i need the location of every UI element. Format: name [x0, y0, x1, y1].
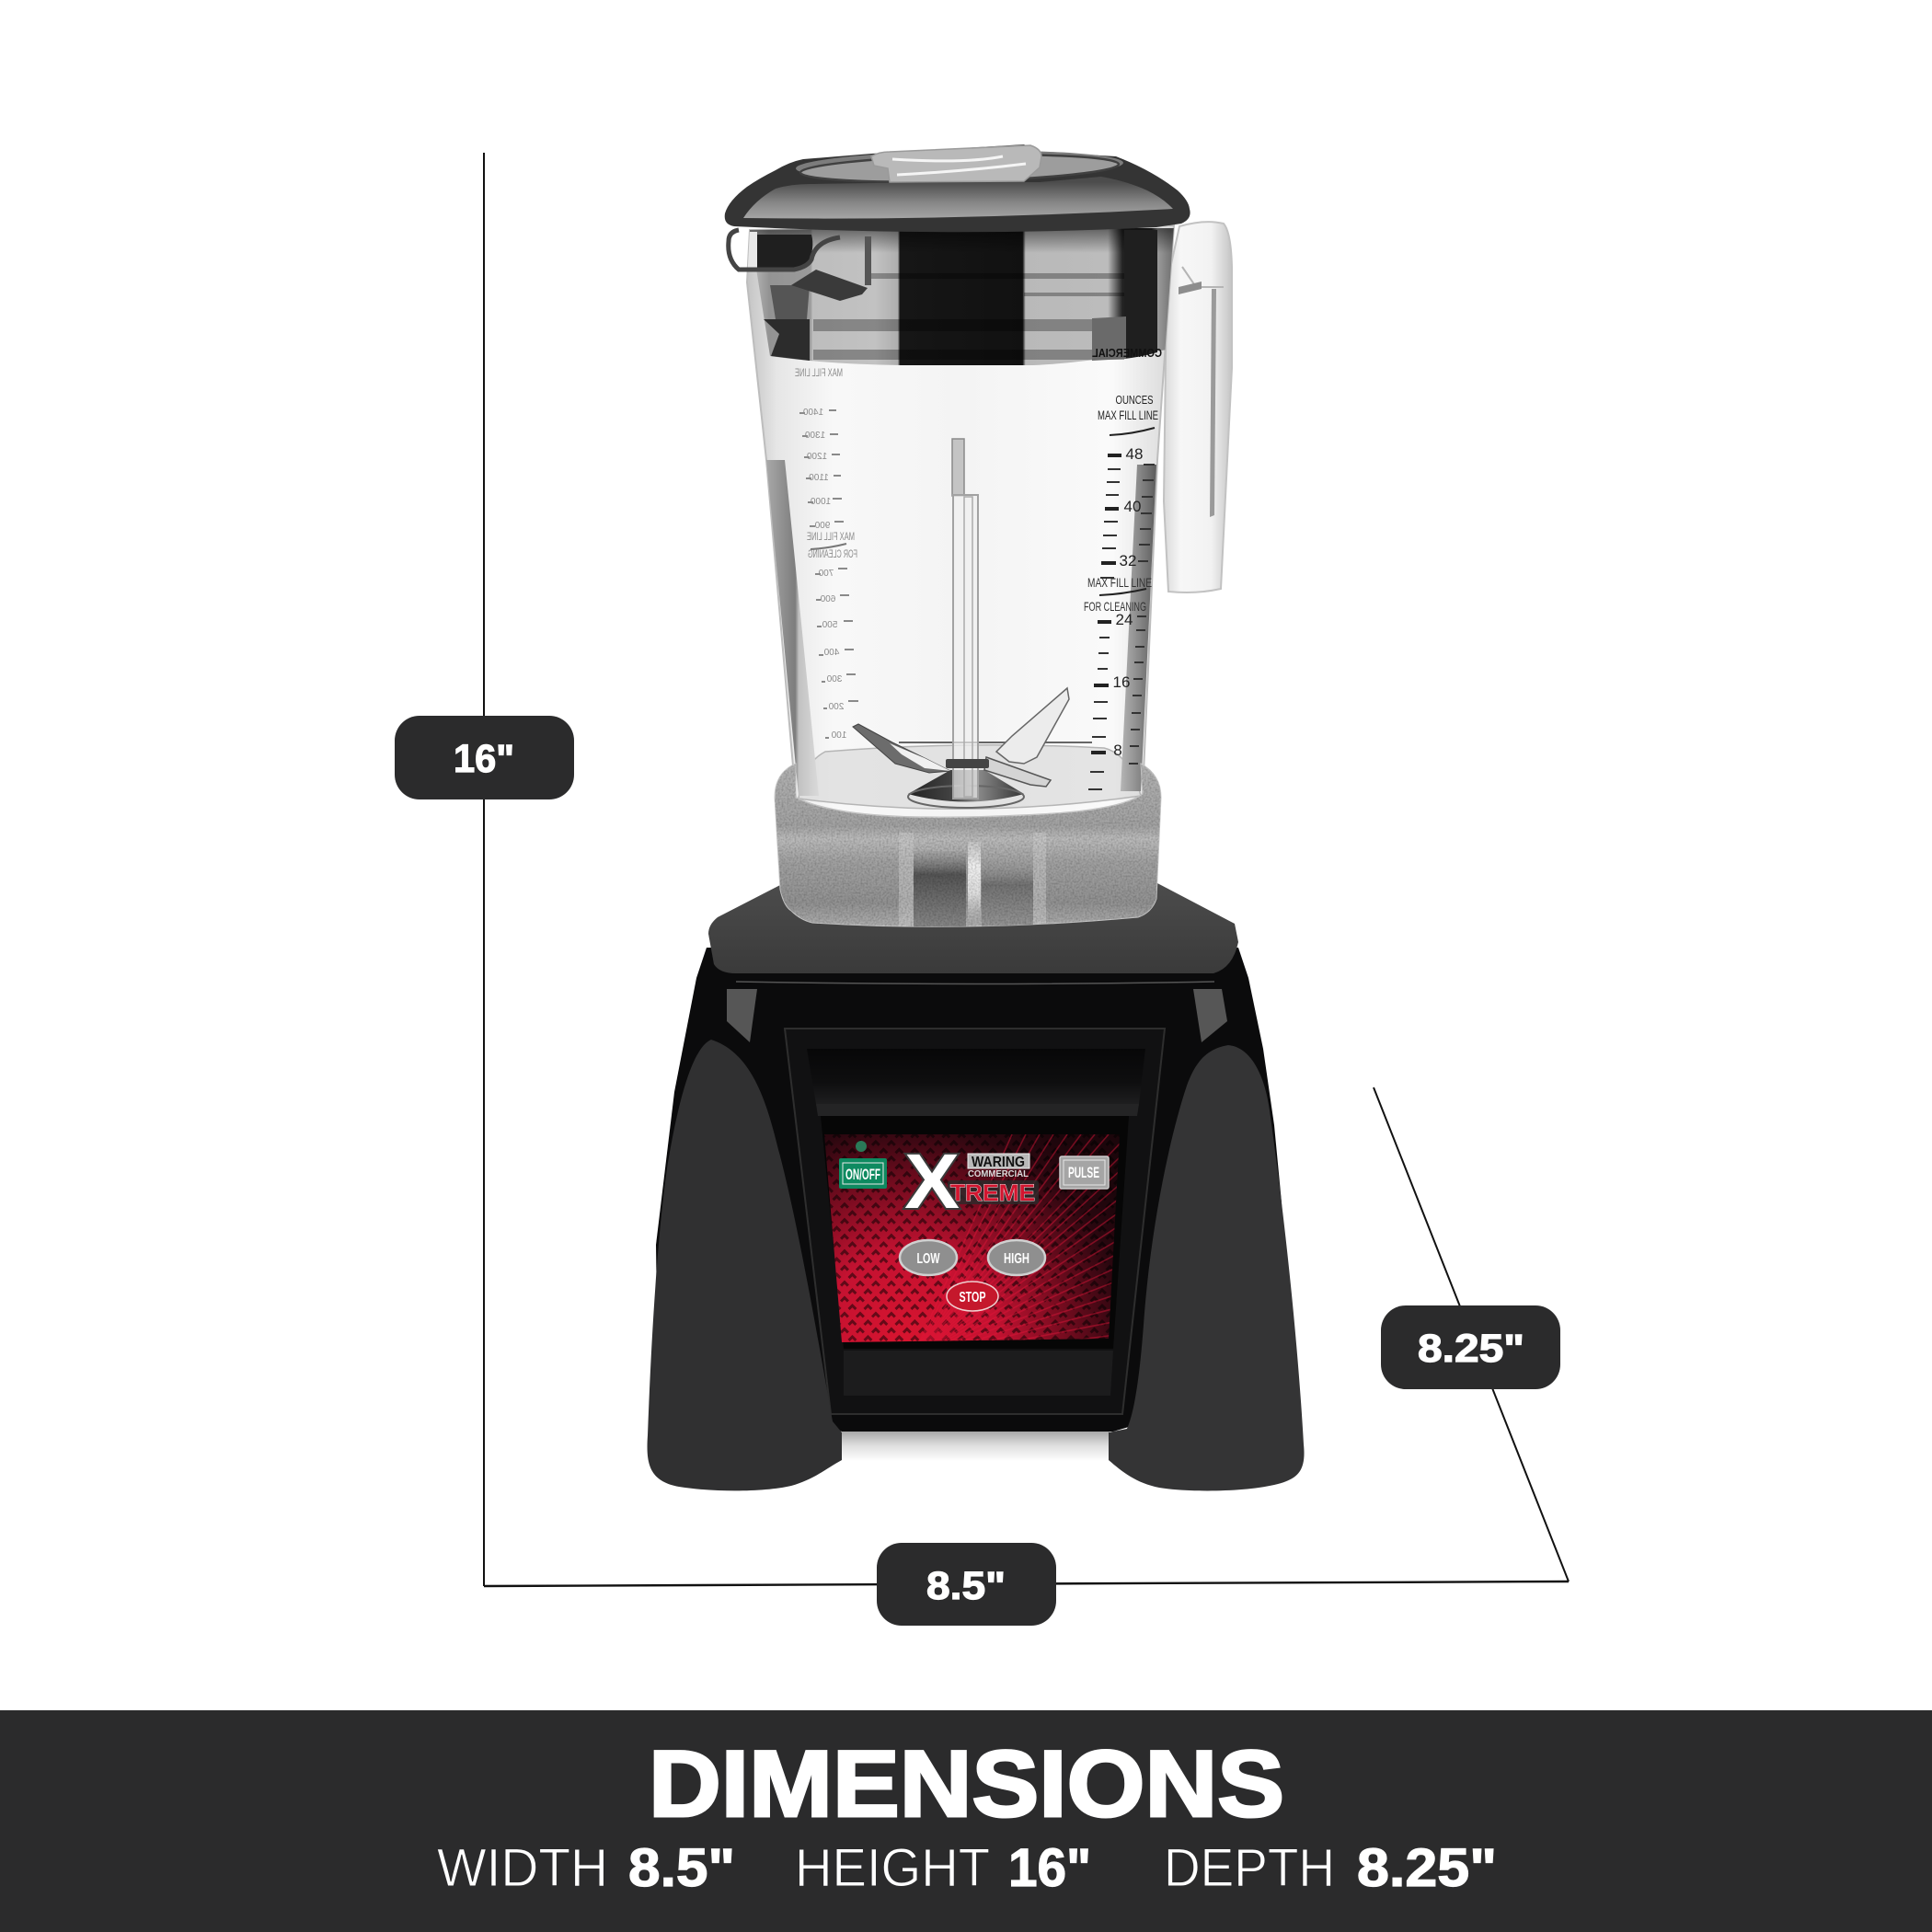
ounce numbers: 32	[1120, 552, 1136, 569]
left mirrored scale	[795, 366, 858, 741]
height label pill: 16"	[454, 737, 514, 781]
pulse button	[1060, 1156, 1109, 1189]
on/off button: ON/OFF	[845, 1166, 880, 1183]
far-side ticks	[1129, 465, 1155, 764]
blade hub	[908, 770, 1024, 802]
gloss highlight left	[727, 989, 757, 1042]
lower right blade	[984, 757, 1051, 787]
recess lip	[816, 1104, 1139, 1116]
blade assembly	[853, 439, 1069, 808]
width label pill	[877, 1543, 1056, 1626]
motor base shell	[656, 948, 1288, 1432]
jar pour spout loop	[729, 230, 840, 270]
cleaning rule	[1099, 589, 1146, 595]
on/off button	[839, 1158, 887, 1189]
millilitre labels: 1000	[810, 497, 831, 507]
millilitre labels: 600	[820, 594, 835, 604]
insert shading	[750, 228, 1174, 253]
lid well	[800, 151, 1119, 186]
width dimension line	[484, 1581, 1569, 1586]
depth dimension line	[1374, 1087, 1569, 1581]
label rays	[919, 1134, 1119, 1341]
lower bar	[844, 1351, 1113, 1396]
hub collar	[946, 759, 989, 768]
right blade	[996, 688, 1069, 764]
brand logo	[904, 1138, 1039, 1225]
footer measurements: WIDTH	[437, 1838, 608, 1898]
millilitre labels: MAX FILL LINE	[807, 530, 855, 543]
collar columns	[775, 762, 1162, 933]
for cleaning label: FOR CLEANING	[1084, 599, 1146, 614]
brand logo: COMMERCIAL	[968, 1169, 1029, 1179]
major ticks	[1091, 455, 1121, 753]
right logo patch	[1092, 316, 1126, 361]
insert ribs	[813, 273, 1124, 360]
millilitre labels: 1300	[804, 431, 825, 441]
high button	[988, 1240, 1045, 1275]
left upper dark	[757, 235, 812, 270]
footer measurements: 16"	[1008, 1838, 1091, 1898]
ounce numbers: 24	[1116, 611, 1133, 628]
millilitre labels: 300	[826, 674, 842, 684]
handle inner edge	[1182, 267, 1224, 287]
handle clip	[1179, 282, 1202, 294]
millilitre labels: 500	[822, 620, 837, 630]
jar collar	[775, 762, 1162, 933]
depth label pill	[1381, 1305, 1560, 1389]
jar body	[747, 225, 1174, 818]
hub ring	[908, 786, 1024, 808]
jar floor outline	[799, 745, 1141, 809]
minor ticks	[1088, 469, 1121, 789]
ounce numbers: 48	[1126, 445, 1143, 463]
gloss highlight right	[1193, 989, 1227, 1042]
shell gloss line	[736, 982, 1214, 984]
floor shadow	[842, 1430, 1110, 1461]
indicator LED	[856, 1141, 867, 1152]
ounce numbers	[1113, 445, 1143, 759]
footer heading: DIMENSIONS	[649, 1731, 1284, 1836]
dark vertical strip	[865, 236, 871, 285]
inner lid insert	[747, 228, 1174, 796]
blender product illustration	[648, 144, 1305, 1490]
low button	[900, 1240, 957, 1275]
brand logo: TREME	[950, 1180, 1035, 1206]
ounce numbers: 16	[1113, 673, 1130, 691]
shaft upper	[952, 439, 964, 496]
handle stripe	[1210, 289, 1216, 517]
blender jar handle	[1164, 222, 1232, 592]
stop button: STOP	[959, 1290, 986, 1305]
left rubber foot	[648, 1040, 842, 1490]
left strip	[766, 460, 819, 796]
brand logo: WARING	[972, 1155, 1025, 1170]
high button: HIGH	[1004, 1251, 1029, 1267]
jar lid	[725, 144, 1190, 232]
right dark column	[1124, 230, 1157, 359]
millilitre labels: 700	[818, 569, 834, 579]
millilitre labels: 900	[814, 521, 830, 531]
stop button	[947, 1282, 998, 1311]
footer measurements: 8.5"	[628, 1838, 735, 1898]
jar floor back line	[899, 742, 1092, 743]
shaft sleeve	[953, 495, 978, 799]
footer band	[0, 1710, 1932, 1932]
depth label pill: 8.25"	[1418, 1327, 1524, 1371]
label well	[821, 1116, 1129, 1349]
left mid clamp	[770, 285, 810, 319]
right measurement scale	[1084, 393, 1158, 789]
millilitre labels: 400	[823, 648, 839, 658]
lid plug highlight	[892, 156, 1026, 175]
collar frost texture	[775, 762, 1162, 933]
red control label	[824, 1134, 1120, 1342]
footer measurements: 8.25"	[1357, 1838, 1497, 1898]
rubber top pad	[708, 883, 1238, 973]
cleaning max fill label: MAX FILL LINE	[1087, 575, 1152, 590]
millilitre labels: 100	[831, 730, 846, 741]
height label pill	[395, 716, 574, 799]
footer measurements	[437, 1838, 1497, 1898]
lid top ring	[796, 148, 1123, 183]
left clamp dark	[764, 319, 810, 361]
left blade	[853, 724, 950, 773]
width label pill: 8.5"	[926, 1564, 1006, 1608]
millilitre labels: 200	[828, 702, 844, 712]
left ticks	[799, 410, 858, 738]
left gloss	[747, 232, 757, 269]
left wedge	[791, 270, 868, 301]
footer measurements: DEPTH	[1164, 1838, 1335, 1898]
millilitre labels: FOR CLEANING	[808, 547, 857, 560]
height dimension line	[483, 153, 485, 1586]
millilitre labels	[795, 366, 857, 741]
upper recess	[807, 1049, 1145, 1104]
lid face	[743, 177, 1173, 219]
right logo mirrored text: COMMERCIAL	[1092, 346, 1162, 360]
footer measurements: HEIGHT	[795, 1838, 990, 1898]
blender jar	[729, 225, 1174, 818]
ounces heading: OUNCES	[1115, 393, 1154, 407]
control panel frame	[785, 1029, 1165, 1414]
brand logo: X	[904, 1138, 960, 1225]
millilitre labels: MAX FILL LINE	[795, 366, 843, 379]
millilitre labels: 1100	[809, 473, 829, 483]
shaft highlight	[964, 497, 972, 797]
right rubber foot	[1109, 1045, 1305, 1490]
cleaning rule mirrored	[811, 544, 846, 549]
pulse button: PULSE	[1068, 1164, 1099, 1181]
millilitre labels: 1400	[802, 408, 823, 418]
left blade highlight	[890, 743, 950, 771]
right strip	[1121, 465, 1156, 791]
label texture	[819, 1130, 1127, 1346]
ounce numbers: 8	[1113, 742, 1122, 759]
ounce numbers: 40	[1124, 498, 1141, 515]
millilitre labels: 1200	[806, 452, 827, 462]
max fill line label: MAX FILL LINE	[1098, 408, 1158, 422]
low button: LOW	[916, 1251, 940, 1267]
lid plug	[871, 145, 1041, 182]
max fill rule	[1110, 428, 1155, 435]
